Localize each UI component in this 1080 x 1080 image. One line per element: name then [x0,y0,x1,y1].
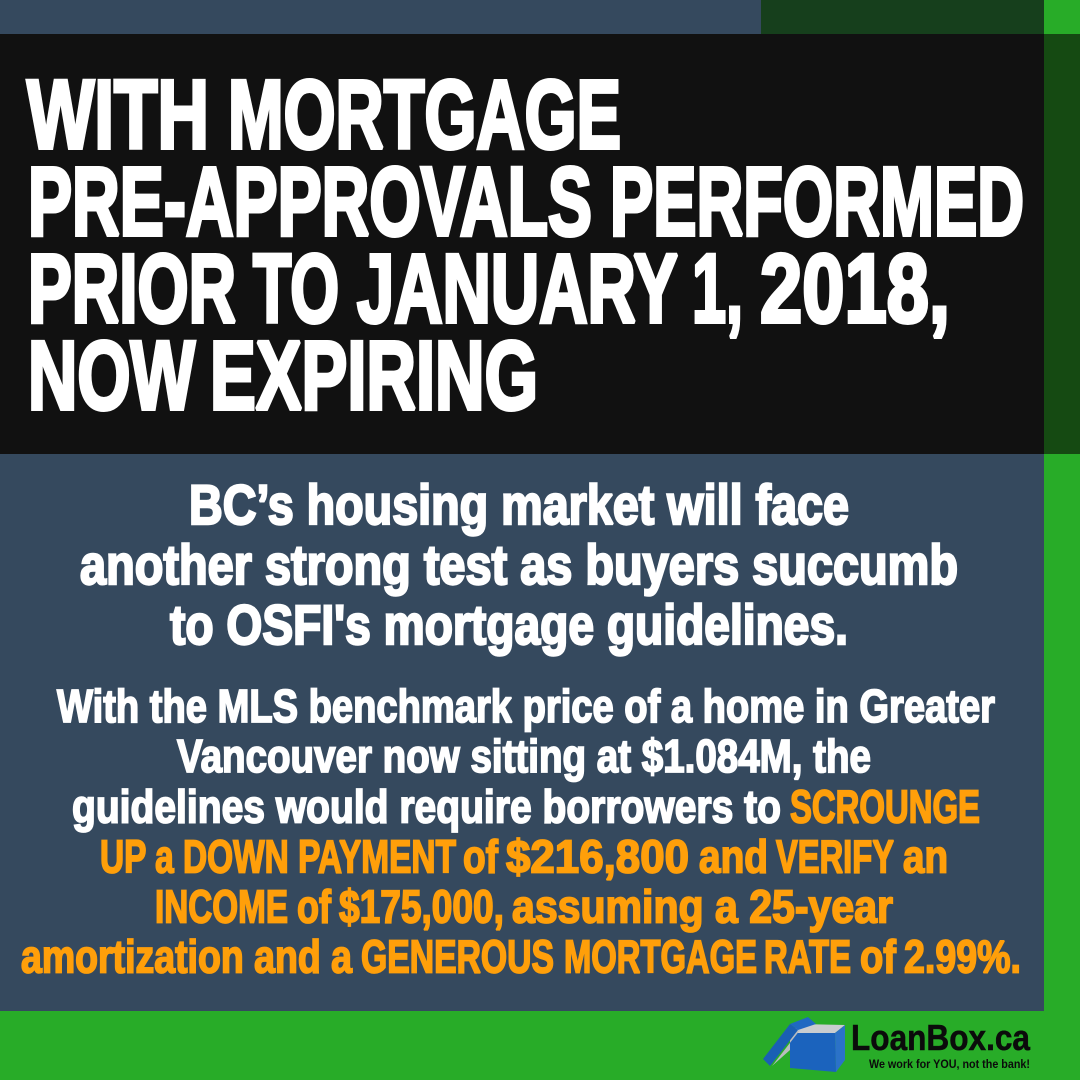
body paragraph text: Vancouver now sitting at $1.084M, the [177,730,871,782]
body paragraph text: $175,000, [339,880,504,932]
body paragraph text: an [903,830,948,882]
body paragraph text: and [699,830,768,882]
subheading text: BC’s housing market will face [189,473,849,536]
heading: title text: TO [253,234,339,343]
body paragraph text: 2.99%. [904,930,1021,982]
heading: title text: JANUARY [357,234,678,343]
body paragraph text: SCROUNGE [790,780,980,832]
body paragraph text: $216,800 [506,830,689,882]
heading: title text: NOW [28,321,195,430]
heading: title text [27,60,1024,430]
body paragraph text: amortization and a [21,930,352,982]
heading: title text: PRE-APPROVALS [28,147,592,256]
body paragraph text: INCOME [155,880,288,932]
body paragraph text: UP a DOWN PAYMENT [100,830,456,882]
logo tagline: We work for YOU, not the bank! [869,1057,1030,1071]
heading: title text: MORTGAGE [228,60,621,169]
body paragraph text: GENEROUS [361,930,554,982]
body paragraph text: assuming a 25-year [512,880,893,932]
top bar: dark green segment [761,0,1044,34]
logo: LoanBox.ca [763,1017,1031,1072]
right side dark green band [1044,34,1080,454]
body paragraph text: VERIFY [776,830,894,882]
logo wordmark: LoanBox.ca [851,1017,1031,1058]
subheading text [80,473,958,656]
heading: title text: WITH [27,60,209,169]
body paragraph text: of [860,930,897,982]
heading: title text: 1, [692,234,743,343]
body paragraph text: of [297,880,332,932]
heading: title text: PRIOR [28,234,236,343]
body paragraph text: of [463,830,499,882]
body paragraph text: guidelines would require borrowers to [72,780,781,832]
heading: title text: EXPIRING [210,321,538,430]
subheading text: to OSFI's mortgage guidelines. [170,593,848,656]
body paragraph text [21,680,1021,982]
icon: open blue box [763,1017,845,1072]
panel: title [0,34,1044,454]
body paragraph text: RATE [764,930,851,982]
panel: body [0,454,1044,1011]
body paragraph text: MORTGAGE [564,930,757,982]
top bar: slate segment [0,0,761,34]
heading: title text: 2018, [760,234,950,343]
